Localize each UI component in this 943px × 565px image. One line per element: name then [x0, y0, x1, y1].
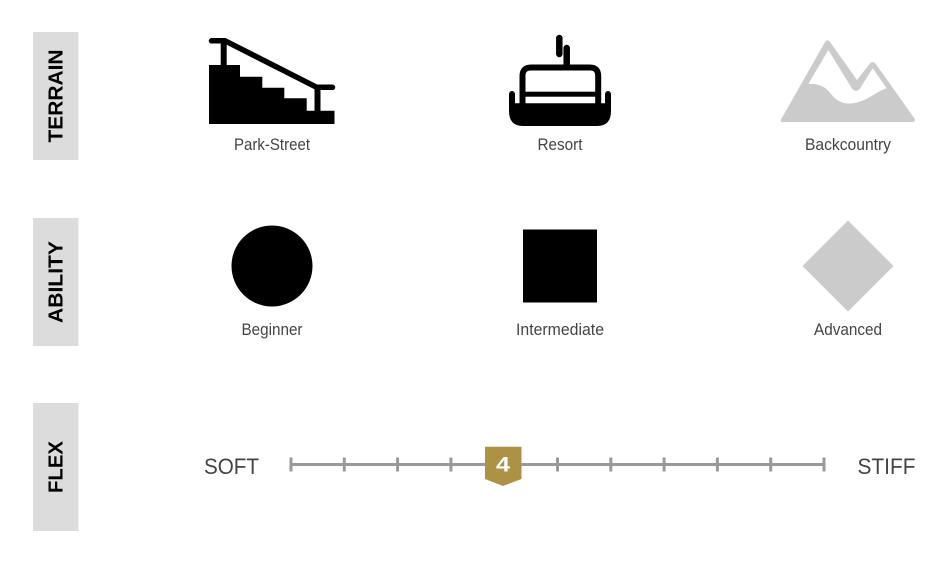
terrain option: resort — [509, 38, 611, 154]
label: Advanced: Advanced — [814, 320, 882, 339]
panel: ability label — [33, 218, 78, 346]
ability option: beginner — [232, 226, 312, 339]
terrain option: park-street — [209, 41, 334, 154]
icon: square — [523, 230, 597, 302]
scale line with ticks — [291, 458, 824, 472]
panel: flex label — [33, 403, 78, 531]
panel: terrain label: TERRAIN — [46, 50, 68, 142]
terrain option: backcountry — [781, 40, 915, 154]
label: SOFT: SOFT — [204, 454, 259, 479]
icon: chairlift — [509, 38, 611, 126]
label: Resort: Resort — [538, 135, 583, 154]
label: Park-Street: Park-Street — [234, 135, 310, 154]
icon: circle — [232, 226, 312, 306]
label: STIFF: STIFF — [858, 454, 916, 479]
icon: mountain — [781, 40, 915, 122]
label: Intermediate: Intermediate — [516, 320, 604, 339]
label: Backcountry: Backcountry — [805, 135, 891, 154]
icon: stairs with handrail — [209, 41, 334, 124]
flex scale — [204, 447, 916, 486]
marker: flex value 4: 4 — [496, 454, 510, 477]
panel: ability label: ABILITY — [46, 240, 68, 323]
panel: flex label: FLEX — [46, 440, 68, 493]
icon: diamond — [802, 220, 894, 312]
ability option: intermediate — [516, 230, 604, 339]
panel: terrain label — [33, 32, 78, 160]
ability option: advanced — [802, 220, 894, 339]
label: Beginner: Beginner — [242, 320, 303, 339]
marker: flex value 4 — [485, 447, 522, 486]
